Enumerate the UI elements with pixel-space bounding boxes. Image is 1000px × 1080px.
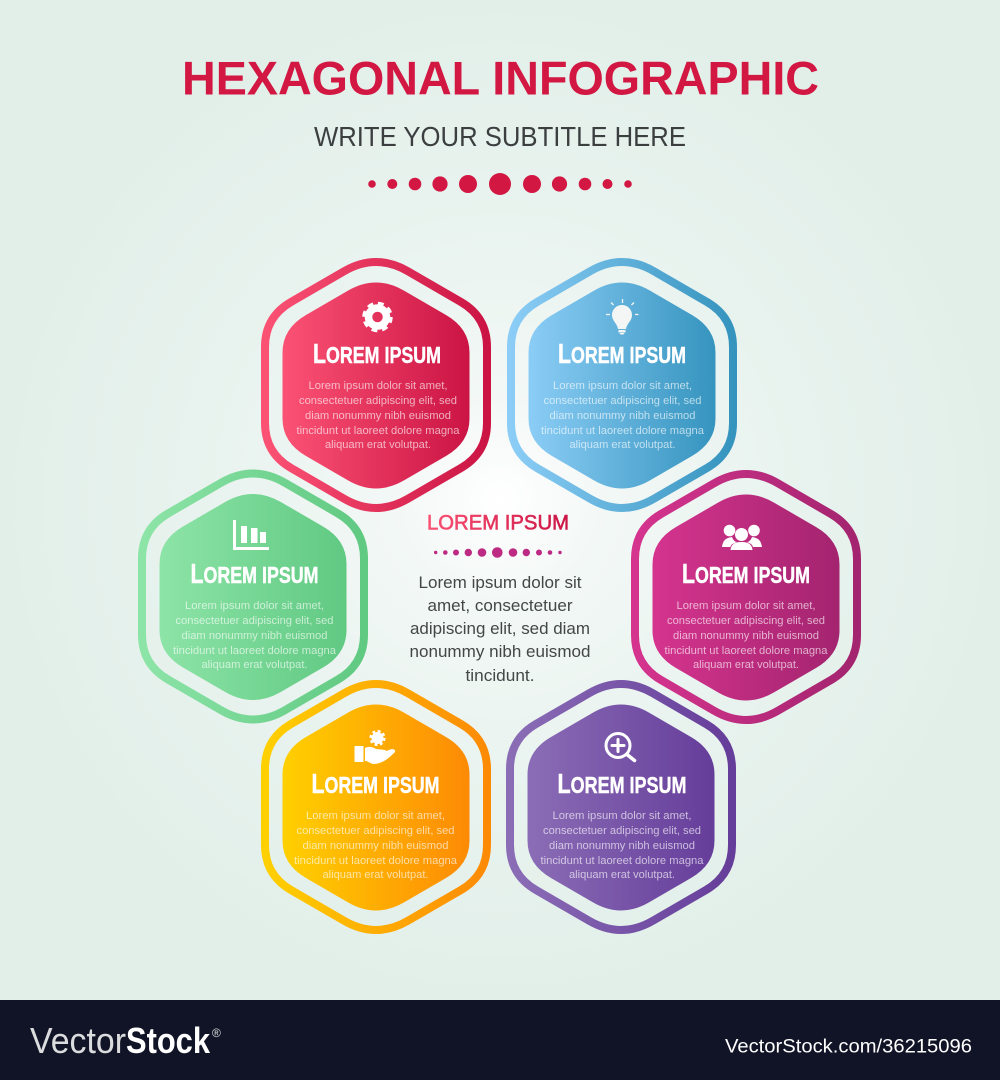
- body text: consectetuer adipiscing elit, sed: [544, 395, 702, 407]
- body text: tincidunt ut laoreet dolore magna: [294, 855, 457, 867]
- vectorstock logo: Vector: [30, 1020, 126, 1061]
- body text: tincidunt ut laoreet dolore magna: [540, 855, 704, 867]
- body text: Lorem ipsum dolor sit amet,: [553, 380, 692, 392]
- body text: Lorem ipsum dolor sit amet,: [185, 600, 324, 612]
- body text: Lorem ipsum dolor sit amet,: [308, 380, 448, 392]
- body text: aliquam erat volutpat.: [322, 869, 428, 881]
- title dots divider: [368, 173, 632, 195]
- body text: consectetuer adipiscing elit, sed: [176, 615, 334, 627]
- vectorstock url: VectorStock.com/36215096: [725, 1036, 972, 1058]
- center body text: tincidunt.: [466, 667, 534, 685]
- heading: LOREM IPSUM: [558, 338, 686, 369]
- heading: LOREM IPSUM: [190, 558, 318, 589]
- heading: LOREM IPSUM: [312, 768, 440, 799]
- icon: light bulb: [606, 299, 638, 334]
- body text: tincidunt ut laoreet dolore magna: [296, 425, 460, 437]
- body text: consectetuer adipiscing elit, sed: [667, 615, 825, 627]
- body text: diam nonummy nibh euismod: [305, 410, 451, 422]
- body text: [541, 380, 704, 451]
- body text: aliquam erat volutpat.: [325, 439, 431, 451]
- body text: [540, 810, 704, 881]
- heading: LOREM IPSUM: [682, 558, 810, 589]
- panel: green hexagon: [142, 474, 364, 720]
- body text: diam nonummy nibh euismod: [550, 410, 696, 422]
- vectorstock logo: ®: [212, 1026, 221, 1040]
- body text: aliquam erat volutpat.: [569, 869, 675, 881]
- body text: [296, 380, 460, 451]
- icon: hand with flower: [354, 731, 395, 764]
- body text: diam nonummy nibh euismod: [182, 630, 328, 642]
- center heading: LOREM IPSUM: [427, 512, 569, 534]
- body text: consectetuer adipiscing elit, sed: [299, 395, 457, 407]
- subtitle: WRITE YOUR SUBTITLE HERE: [314, 121, 686, 152]
- center dots divider: [434, 547, 562, 558]
- center body text: [410, 574, 590, 685]
- heading: LOREM IPSUM: [558, 768, 686, 799]
- body text: aliquam erat volutpat.: [202, 659, 308, 671]
- icon: gear: [364, 304, 390, 330]
- panel: purple hexagon: [510, 684, 732, 930]
- panel: magenta hexagon: [635, 474, 857, 720]
- body text: Lorem ipsum dolor sit amet,: [676, 600, 816, 612]
- body text: diam nonummy nibh euismod: [549, 840, 695, 852]
- body text: aliquam erat volutpat.: [570, 439, 676, 451]
- panel: orange hexagon: [265, 684, 487, 930]
- vectorstock logo: Stock: [126, 1020, 211, 1061]
- body text: Lorem ipsum dolor sit amet,: [306, 810, 445, 822]
- body text: consectetuer adipiscing elit, sed: [543, 825, 701, 837]
- center body text: nonummy nibh euismod: [410, 643, 590, 661]
- center block: [410, 512, 590, 685]
- center body text: adipiscing elit, sed diam: [410, 620, 590, 638]
- icon: magnifier: [606, 734, 634, 760]
- heading: LOREM IPSUM: [313, 338, 441, 369]
- center body text: Lorem ipsum dolor sit: [418, 574, 582, 592]
- body text: Lorem ipsum dolor sit amet,: [552, 810, 692, 822]
- body text: [294, 810, 457, 881]
- center body text: amet, consectetuer: [428, 597, 573, 615]
- watermark bar: [0, 1000, 1000, 1080]
- icon: bar chart: [233, 520, 269, 550]
- body text: consectetuer adipiscing elit, sed: [296, 825, 455, 837]
- body text: [173, 600, 336, 671]
- vectorstock logo: [30, 1020, 221, 1061]
- panel: blue hexagon: [511, 262, 733, 508]
- body text: tincidunt ut laoreet dolore magna: [173, 645, 336, 657]
- body text: [664, 600, 828, 671]
- body text: tincidunt ut laoreet dolore magna: [541, 425, 704, 437]
- body text: aliquam erat volutpat.: [693, 659, 799, 671]
- body text: diam nonummy nibh euismod: [673, 630, 819, 642]
- icon: people: [722, 525, 762, 550]
- title: HEXAGONAL INFOGRAPHIC: [182, 52, 819, 104]
- body text: tincidunt ut laoreet dolore magna: [664, 645, 828, 657]
- body text: diam nonummy nibh euismod: [302, 840, 449, 852]
- panel: red hexagon: [265, 262, 487, 508]
